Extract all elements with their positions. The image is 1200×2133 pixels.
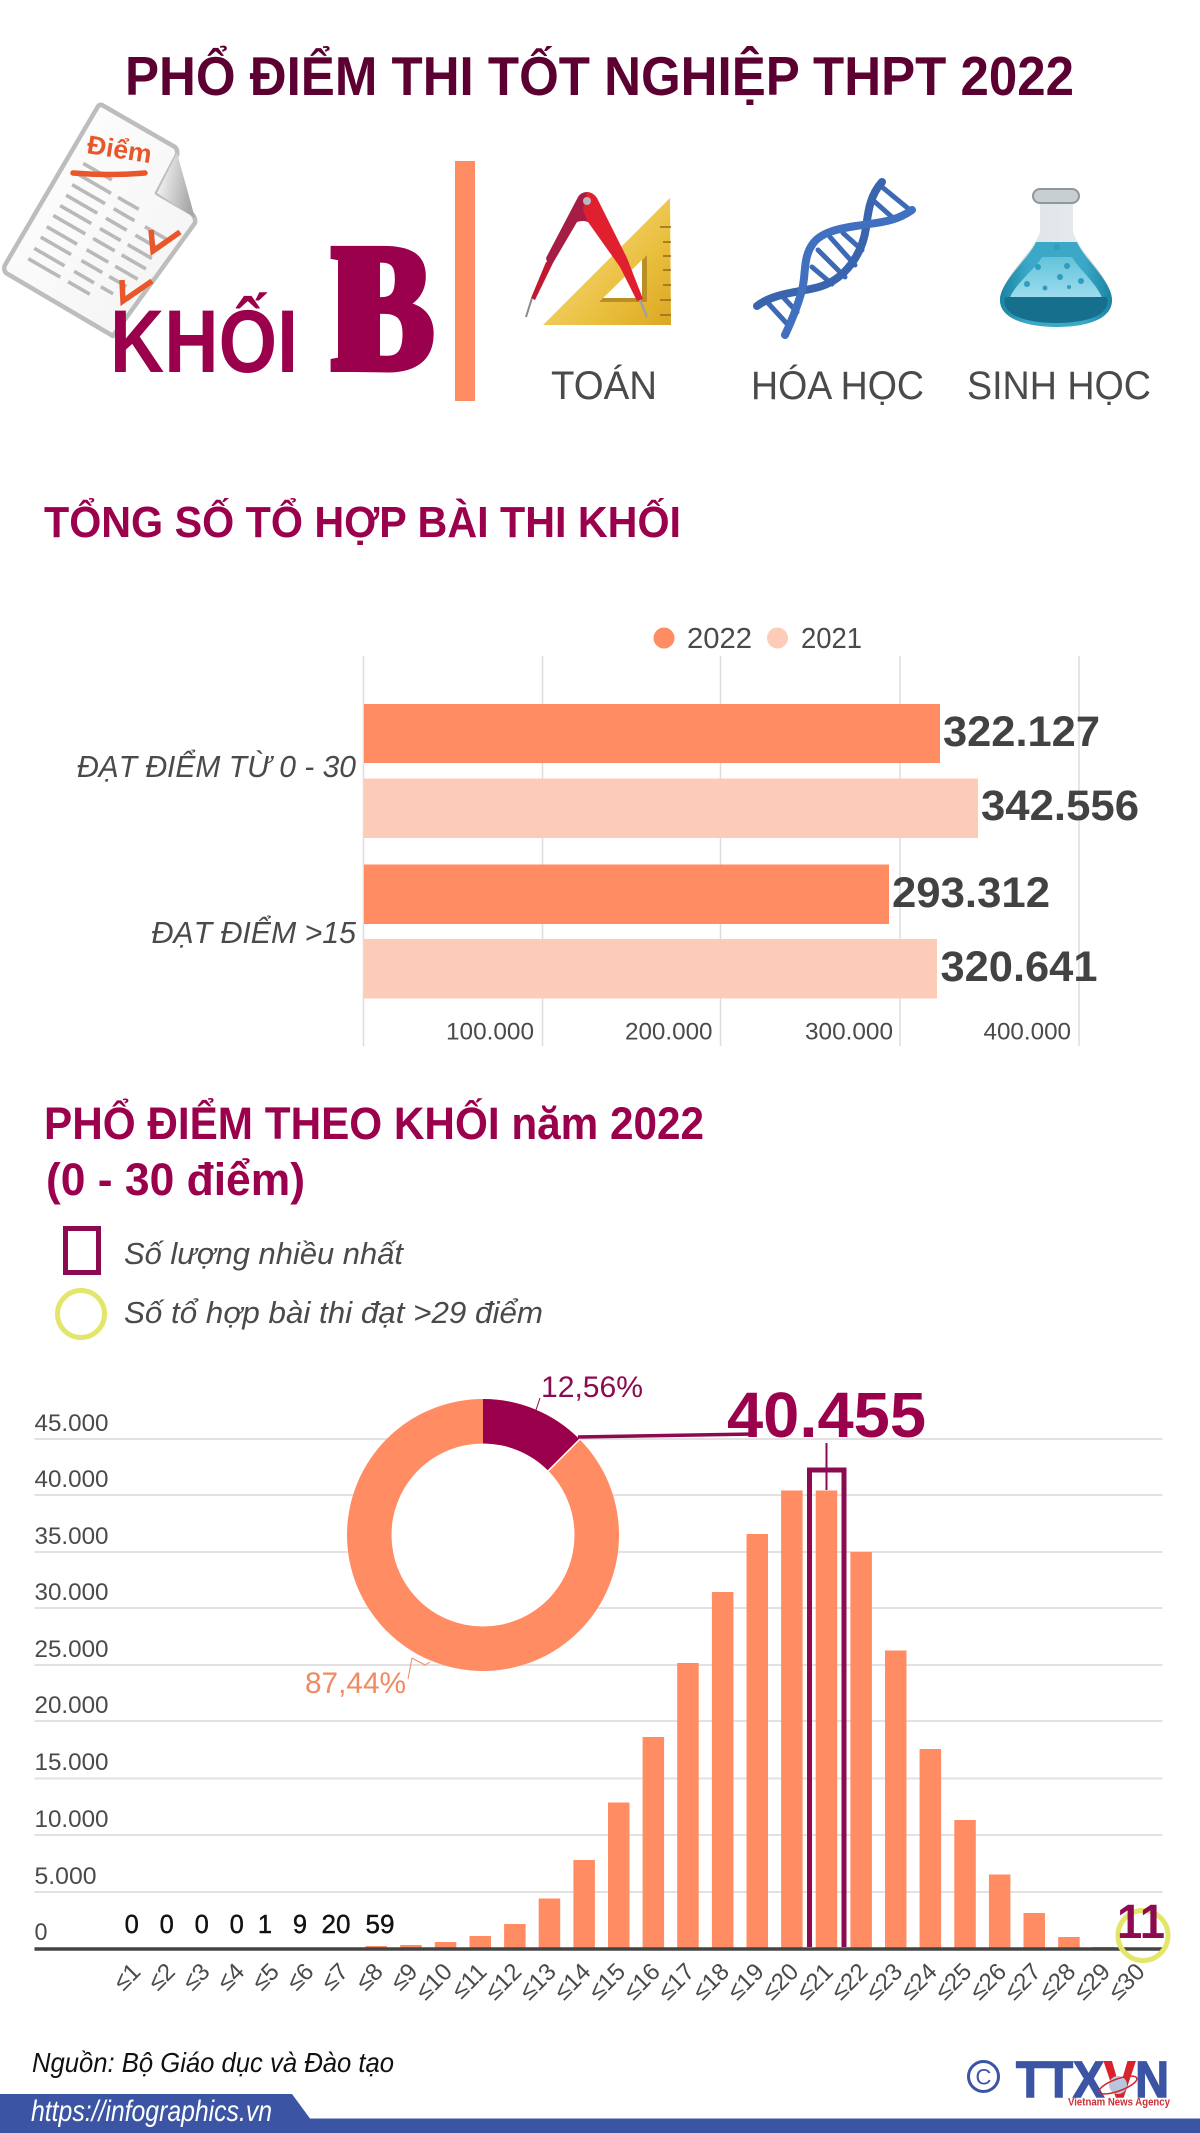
bar chart: totals: 322.127 [943,708,1100,756]
chart: score distribution: 30.000 [34,1579,108,1606]
chart: score distribution: 15.000 [34,1749,108,1776]
icon: flask [1000,189,1112,327]
icon: DNA [757,182,912,335]
legend: markers: Số tổ hợp bài thi đạt >29 điểm [124,1295,543,1330]
chart: score distribution: 35.000 [34,1523,108,1550]
bar chart: totals: 100.000 [446,1018,534,1046]
logo: TTXVN: Vietnam News Agency [1068,2097,1171,2109]
icon: compass and set square [526,192,671,325]
chart: score distribution: ≤18 [688,1958,735,2005]
bar chart: totals [77,656,1139,1046]
logo: TTXVN: TTXVN [1016,2051,1169,2108]
chart: score distribution: 5.000 [34,1863,96,1890]
donut chart: share above 15: 87,44% [305,1667,406,1700]
footer bar: https://infographics.vn [31,2095,272,2128]
chart: score distribution: 20.000 [34,1692,108,1719]
heading: khoi B [110,208,435,408]
subject labels: HÓA HỌC [751,363,924,408]
chart: score distribution: ≤21 [791,1958,839,2005]
highlight: score 30 count: 11 [1117,1896,1165,1949]
chart: score distribution: ≤27 [999,1958,1047,2005]
chart: score distribution: ≤7 [316,1958,354,1996]
icon: exam paper: Điểm [85,129,154,169]
heading: distribution: PHỔ ĐIỂM THEO KHỐI năm 2022 [44,1098,704,1149]
footer bar [0,2094,1200,2133]
heading: distribution [44,1098,704,1205]
chart: score distribution: ≤17 [653,1958,700,2005]
heading: total: TỔNG SỐ TỔ HỢP BÀI THI KHỐI [44,496,681,547]
bar chart: totals: 342.556 [981,782,1139,830]
chart: score distribution: ≤12 [480,1958,527,2005]
highlight: maximum bar [810,1443,844,1947]
chart: score distribution: 10.000 [34,1806,108,1833]
chart: score distribution: 40.000 [34,1466,108,1493]
bar chart: totals: 293.312 [892,869,1050,917]
chart: score distribution: ≤24 [895,1958,943,2005]
heading: khoi B: KHỐI [110,291,298,391]
chart: score distribution: 0 [34,1919,48,1946]
chart: score distribution: ≤6 [281,1958,319,1996]
chart: score distribution: ≤8 [351,1958,389,1996]
chart: score distribution: ≤26 [965,1958,1012,2005]
chart: score distribution: ≤29 [1069,1958,1116,2005]
chart: score distribution: 25.000 [34,1636,108,1663]
subject labels: TOÁN [551,363,657,408]
callout: 40.455 [578,1379,926,1451]
chart: score distribution: ≤4 [212,1958,250,1996]
chart: score distribution: 0 [125,1911,139,1939]
chart: score distribution: ≤20 [757,1958,804,2005]
chart: score distribution: 1 [258,1911,272,1939]
chart: score distribution: ≤13 [514,1958,562,2005]
heading: khoi B: B [331,208,435,408]
chart: score distribution: ≤3 [178,1958,215,1996]
donut chart: share above 15: 12,56% [541,1371,643,1404]
chart: score distribution: 45.000 [34,1410,108,1437]
icon: exam paper [4,105,195,336]
chart: score distribution: 0 [230,1911,244,1939]
chart: score distribution: ≤9 [385,1958,423,1996]
chart: score distribution: ≤25 [930,1958,977,2005]
chart: score distribution: ≤23 [861,1958,908,2005]
legend: markers: Số lượng nhiều nhất [124,1236,404,1271]
bar chart: totals: 320.641 [940,943,1098,991]
chart: score distribution: ≤14 [549,1958,596,2005]
bar chart: totals: 300.000 [805,1018,893,1046]
vertical divider [455,161,475,401]
chart: score distribution: 0 [195,1911,209,1939]
chart: score distribution: ≤19 [722,1958,770,2005]
legend: years [654,623,862,655]
legend: years: 2021 [801,623,862,655]
chart: score distribution: 9 [293,1911,307,1939]
logo: TTXVN: C [976,2064,992,2090]
chart: score distribution: ≤16 [618,1958,666,2005]
chart: score distribution: ≤5 [247,1958,285,1996]
chart: score distribution: ≤30 [1103,1958,1150,2005]
bar chart: totals: ĐẠT ĐIỂM >15 [152,915,357,950]
chart: score distribution: ≤1 [108,1958,146,1996]
title: PHỔ ĐIỂM THI TỐT NGHIỆP THPT 2022 [125,45,1074,107]
legend: markers [58,1228,543,1338]
bar chart: totals: 400.000 [984,1018,1071,1046]
bar chart: totals: 200.000 [625,1018,712,1046]
subject labels [551,363,1151,408]
legend: years: 2022 [687,623,752,655]
bar chart: totals: ĐẠT ĐIỂM TỪ 0 - 30 [77,749,356,784]
chart: score distribution: 0 [160,1911,174,1939]
chart: score distribution: ≤15 [584,1958,631,2005]
callout: 40.455: 40.455 [727,1379,926,1451]
subject labels: SINH HỌC [967,364,1151,408]
chart: score distribution: ≤22 [826,1958,873,2005]
chart: score distribution: ≤11 [446,1958,492,2004]
chart: score distribution: ≤2 [143,1958,181,1996]
chart: score distribution: ≤28 [1034,1958,1081,2005]
chart: score distribution: 20 [322,1911,350,1939]
donut chart: share above 15 [305,1371,643,1700]
chart: score distribution: 59 [366,1911,394,1939]
chart: score distribution: ≤10 [411,1958,458,2005]
chart: score distribution [34,1410,1162,2005]
heading: distribution: (0 - 30 điểm) [46,1154,305,1205]
source: Nguồn: Bộ Giáo dục và Đào tạo [32,2047,394,2078]
